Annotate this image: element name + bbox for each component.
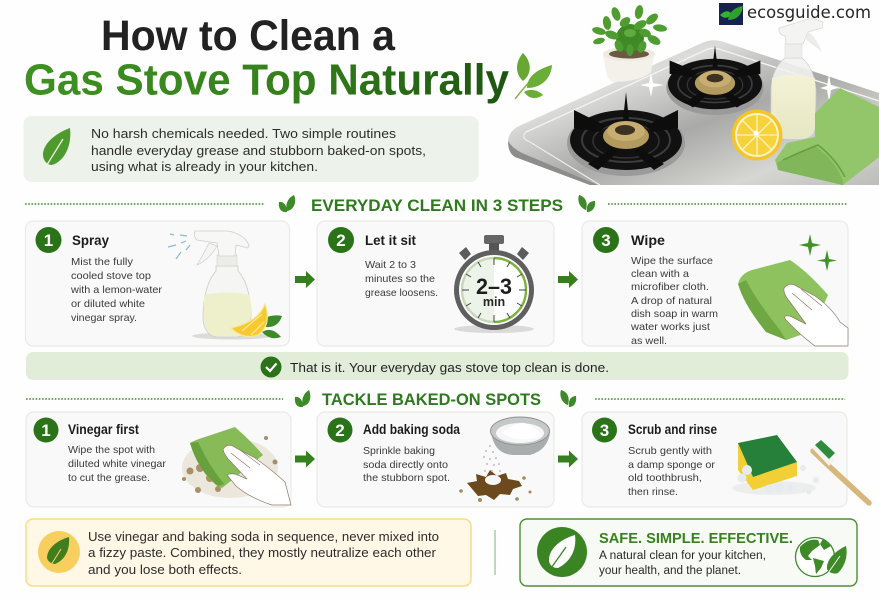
logo mark (719, 3, 743, 25)
title line 1: How to Clean a (101, 12, 396, 60)
burner: back (666, 45, 764, 115)
spray bottle (771, 18, 823, 139)
body: Wait 2 to 3 (365, 259, 416, 271)
body: clean with a (631, 268, 689, 280)
icon: sponge (732, 435, 819, 495)
body: as well. (631, 335, 667, 347)
icon: leaf in green circle (537, 527, 587, 577)
heading: Scrub and rinse (628, 422, 717, 437)
step number 3: 3 (601, 231, 611, 250)
step number 1 (34, 418, 58, 442)
heading: Add baking soda (363, 422, 460, 437)
icon: stopwatch 2-3 min (454, 235, 534, 333)
burner: front (567, 92, 685, 176)
stove plate (508, 40, 879, 185)
body: cooled stove top (71, 270, 151, 282)
panel: step 1 spray (26, 221, 290, 346)
body (70, 256, 163, 324)
icon: heading leaf left (279, 195, 295, 212)
heading: Wipe (631, 233, 666, 248)
body: diluted white vinegar (68, 458, 167, 470)
step number 2: 2 (336, 231, 346, 250)
arrow (295, 450, 315, 468)
icon: heading leaf right (560, 390, 576, 407)
arrow (558, 271, 578, 288)
body: with a lemon-water (70, 284, 163, 296)
body: dish soap in warm (631, 308, 718, 320)
step number 1: 1 (41, 421, 51, 440)
heading text: EVERYDAY CLEAN IN 3 STEPS (311, 196, 563, 215)
body: Wipe the surface (631, 255, 713, 267)
heading: Let it sit (365, 233, 416, 248)
body: A drop of natural (631, 295, 712, 307)
body (630, 255, 718, 347)
callout heading: SAFE. SIMPLE. EFFECTIVE. (599, 530, 793, 547)
lemon half (732, 110, 782, 160)
body: old toothbrush, (628, 472, 702, 484)
icon: stopwatch 2-3 min: 2–3 (476, 274, 512, 299)
icon: cloth and hand (738, 260, 848, 346)
panel: baked step 3 scrub (582, 412, 869, 507)
heading: Vinegar first (68, 422, 139, 437)
body: microfiber cloth. (631, 281, 709, 293)
body: Sprinkle baking (363, 445, 435, 457)
body (68, 444, 167, 484)
callout text: and you lose both effects. (88, 562, 242, 577)
icon: cloth wiping grease (182, 427, 291, 505)
panel: step 3 wipe (582, 221, 848, 347)
step number 2 (328, 227, 354, 253)
plant in pot (591, 4, 668, 82)
callout: warning note (26, 519, 471, 586)
body: Mist the fully (71, 256, 134, 268)
body: or diluted white (71, 298, 145, 310)
panel: intro (24, 116, 478, 182)
body (628, 445, 716, 498)
icon: heading leaf left (295, 390, 310, 407)
sparkles (640, 73, 838, 102)
body: the stubborn spot. (363, 472, 450, 484)
intro text (91, 126, 426, 174)
heading text: TACKLE BAKED-ON SPOTS (322, 390, 541, 409)
body: Wipe the spot with (68, 444, 155, 456)
callout text (88, 529, 439, 577)
step number 2 (328, 418, 352, 442)
heading: Spray (72, 233, 109, 248)
step number 3 (592, 418, 617, 442)
callout: safe simple effective (520, 519, 857, 586)
body: grease loosens. (365, 287, 438, 299)
icon: stopwatch 2-3 min: min (483, 295, 505, 309)
body: to cut the grease. (68, 472, 150, 484)
step number 3 (593, 227, 619, 253)
logo: ecosguide.com (719, 3, 871, 25)
step number 3: 3 (600, 421, 609, 440)
intro text: No harsh chemicals needed. Two simple routines (91, 126, 397, 141)
title (24, 12, 510, 104)
arrow (558, 450, 578, 468)
callout text (599, 550, 766, 577)
icon: heading leaf right (578, 195, 595, 212)
title line 2: Gas Stove Top Naturally (24, 56, 510, 104)
body: minutes so the (365, 273, 435, 285)
callout text: a fizzy paste. Combined, they mostly neutralize each other (88, 545, 437, 560)
step number 1 (36, 227, 62, 253)
arrow (295, 271, 315, 288)
section heading: baked-on spots (26, 390, 845, 409)
step number 2: 2 (335, 421, 345, 440)
logo text: ecosguide.com (747, 3, 871, 23)
icon: spray bottle with lemon (168, 231, 282, 340)
icon: title leaf sprig (515, 53, 552, 99)
icon: check (260, 356, 282, 378)
body (363, 445, 450, 484)
banner: done (26, 352, 848, 380)
body (365, 259, 438, 299)
panel: step 2 let it sit (317, 221, 554, 346)
intro text: using what is already in your kitchen. (91, 159, 318, 174)
icon: globe and leaf (796, 538, 847, 576)
callout text: Use vinegar and baking soda in sequence, never mixed into (88, 529, 439, 544)
banner text: That is it. Your everyday gas stove top clean is done. (290, 360, 609, 375)
callout text: your health, and the planet. (599, 565, 741, 577)
panel: baked step 1 vinegar (26, 412, 291, 507)
icon: leaf (43, 128, 70, 168)
panel: baked step 2 baking soda (317, 412, 554, 507)
icon: toothbrush (812, 440, 869, 503)
body: soda directly onto (363, 459, 448, 471)
icon: leaf in yellow circle (38, 531, 80, 573)
section heading: everyday clean (25, 195, 848, 215)
icon: sparkles (799, 234, 837, 271)
body: water works just (630, 321, 710, 333)
step number 1: 1 (44, 231, 53, 250)
body: a damp sponge or (628, 459, 716, 471)
body: Scrub gently with (628, 445, 712, 457)
body: vinegar spray. (71, 312, 137, 324)
green cloth (775, 88, 879, 185)
callout text: A natural clean for your kitchen, (599, 550, 766, 562)
body: then rinse. (628, 486, 678, 498)
icon: bowl and sprinkled soda on stain (459, 417, 550, 502)
intro text: handle everyday grease and stubborn baked-on spots, (91, 143, 426, 158)
illustration: gas stove top hero (508, 4, 879, 185)
